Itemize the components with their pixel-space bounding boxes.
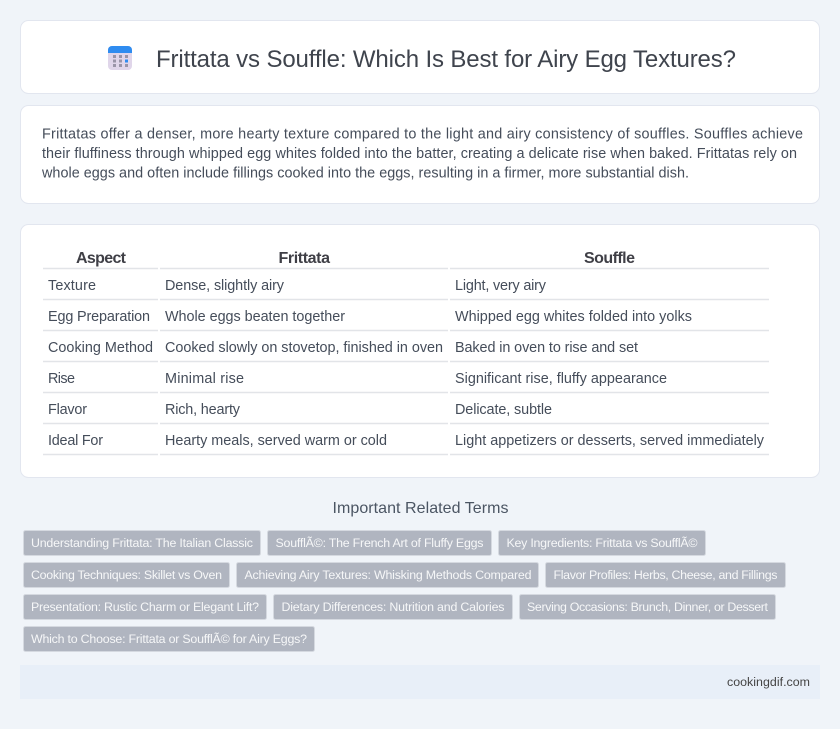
tag (274, 594, 512, 620)
tag: Serving Occasions: Brunch, Dinner, or Dessert (527, 600, 769, 614)
table header: Frittata (278, 250, 330, 267)
panel: intro paragraph: whole eggs and often include fillings cooked into the eggs, resulting in a firmer, more substantial dish. (41, 166, 689, 182)
row: flavor: Rich, hearty (165, 402, 241, 418)
row: egg preparation (48, 309, 692, 325)
row: cooking method: Cooking Method (48, 340, 153, 356)
panel: comparison table (20, 224, 820, 478)
row: egg preparation: Egg Preparation (48, 309, 150, 325)
row: flavor (48, 402, 552, 418)
row: rise (48, 371, 667, 387)
tag: Understanding Frittata: The Italian Classic (31, 536, 253, 550)
panel: intro paragraph (20, 106, 820, 204)
row: ideal for: Ideal For (48, 433, 103, 449)
row: texture (48, 278, 547, 294)
footer bar (20, 665, 820, 699)
row: cooking method: Cooked slowly on stovetop, finished in oven (165, 340, 443, 356)
row: texture: Texture (48, 278, 96, 294)
row: flavor: Flavor (48, 402, 87, 418)
tag (498, 530, 706, 556)
tag (268, 530, 492, 556)
tag: Achieving Airy Textures: Whisking Methods Compared (244, 568, 532, 582)
footer bar: cookingdif.com (727, 675, 810, 689)
panel: intro paragraph: Frittatas offer a denser, more hearty texture compared to the light and airy consistency of souffles. Souffles achieve (42, 126, 803, 142)
table header (76, 250, 635, 267)
table header: Aspect (76, 250, 127, 267)
row: cooking method: Baked in oven to rise and set (455, 340, 638, 356)
row: cooking method (48, 340, 638, 356)
tag: Which to Choose: Frittata or SoufflÃ© for Airy Eggs? (31, 632, 307, 646)
tag: Key Ingredients: Frittata vs SoufflÃ© (506, 536, 698, 550)
row: flavor: Delicate, subtle (455, 402, 552, 418)
row: ideal for: Light appetizers or desserts, served immediately (455, 433, 765, 449)
panel: title header (20, 20, 820, 94)
panel: related term tags (24, 530, 786, 652)
row: rise: Significant rise, fluffy appearance (455, 371, 667, 387)
tag (24, 626, 314, 652)
row: rise: Rise (48, 371, 75, 387)
row: texture: Light, very airy (455, 278, 547, 294)
title: Frittata vs Souffle: Which Is Best for Airy Egg Textures? (156, 46, 736, 73)
tag: Flavor Profiles: Herbs, Cheese, and Fillings (554, 568, 778, 582)
row: egg preparation: Whipped egg whites folded into yolks (455, 309, 692, 325)
tag (236, 562, 538, 588)
panel: intro paragraph: their fluffiness through whipped egg whites folded into the batter, creating a delicate rise when baked. Frittatas rely on (42, 146, 797, 162)
table header: Souffle (584, 250, 635, 267)
row: ideal for (48, 433, 765, 449)
heading: important related terms: Important Related Terms (332, 500, 508, 517)
row: ideal for: Hearty meals, served warm or cold (165, 433, 387, 449)
tag: Cooking Techniques: Skillet vs Oven (31, 568, 222, 582)
tag: Dietary Differences: Nutrition and Calories (282, 600, 504, 614)
row: egg preparation: Whole eggs beaten together (165, 309, 345, 325)
tag: Presentation: Rustic Charm or Elegant Lift? (31, 600, 259, 614)
tag (24, 594, 266, 620)
tag (520, 594, 776, 620)
row: texture: Dense, slightly airy (165, 278, 285, 294)
tag (24, 562, 230, 588)
tag (24, 530, 260, 556)
tag: SoufflÃ©: The French Art of Fluffy Eggs (276, 536, 484, 550)
icon: calendar (108, 46, 132, 70)
row: rise: Minimal rise (165, 371, 244, 387)
tag (546, 562, 786, 588)
